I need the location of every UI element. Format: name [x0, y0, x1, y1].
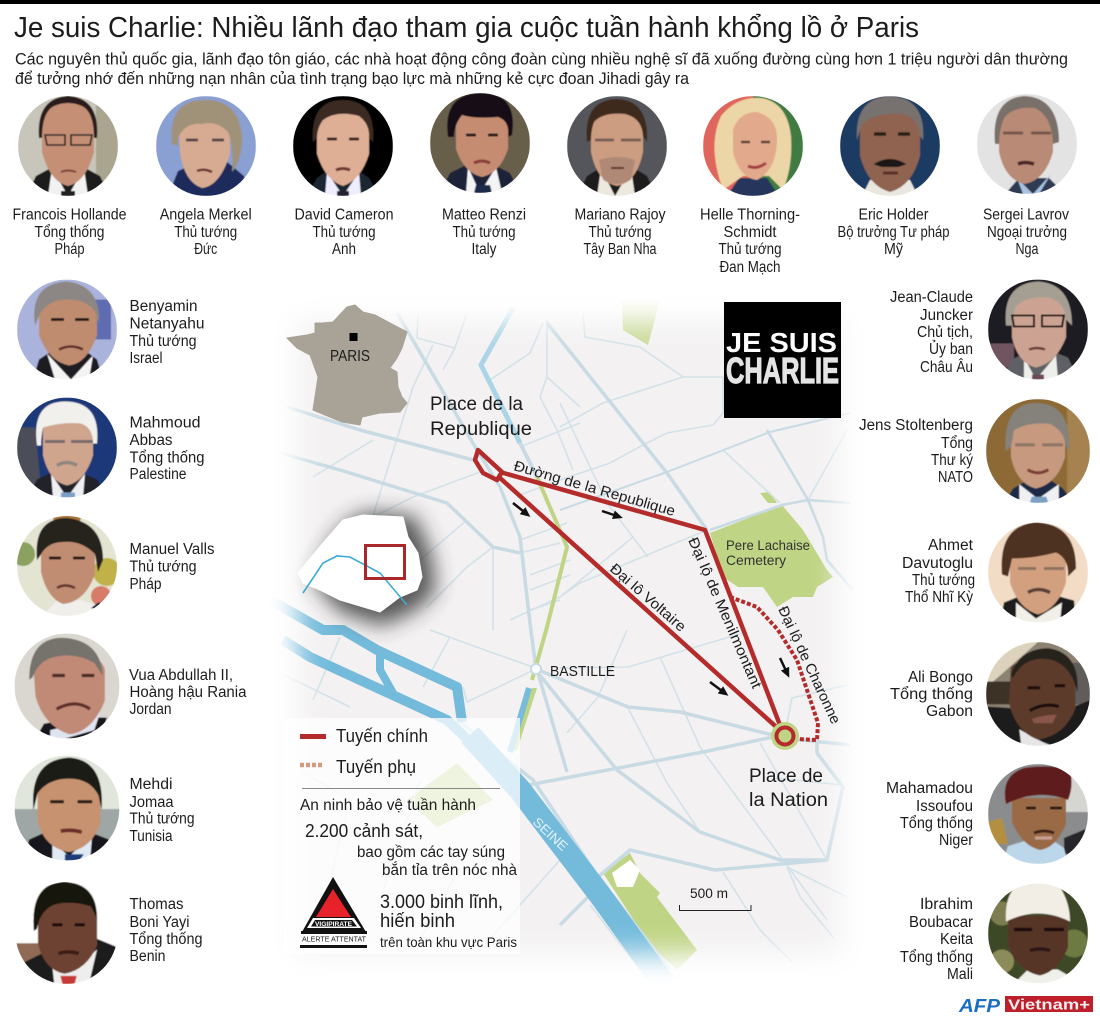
- person: Jean-Claude Juncker: Juncker: [920, 307, 973, 324]
- person: Manuel Valls: Manuel Valls: [130, 541, 215, 558]
- map labels: Đại lộ de Charonne: [774, 604, 843, 727]
- map labels: SEINE: [530, 814, 571, 854]
- security text: 3.000 binh lĩnh,: [380, 892, 503, 913]
- person: Jens Stoltenberg: [859, 399, 1090, 503]
- person: Jens Stoltenberg: Jens Stoltenberg: [859, 417, 973, 434]
- person: Thomas Boni Yayi: Benin: [130, 948, 166, 965]
- green areas: [407, 300, 833, 970]
- Paris marker: [330, 333, 370, 365]
- Place de la Nation marker: [771, 722, 799, 750]
- legend: main route: [300, 726, 428, 746]
- person: Ibrahim Boubacar Keita: Ibrahim: [920, 896, 973, 913]
- person: King Abdullah II: [15, 634, 247, 738]
- person: Mariano Rajoy: Mariano Rajoy: [574, 206, 666, 224]
- person: Eric Holder: Mỹ: [884, 241, 903, 258]
- legend panel: [284, 718, 520, 954]
- map: [260, 290, 870, 990]
- intro text: Các nguyên thủ quốc gia, lãnh đạo tôn giáo, các nhà hoạt động công đoàn cùng nhiều nghệ sĩ đã xuống đường cùng hơn 1 triệu người dân thường: [15, 50, 1068, 68]
- logo: Je suis Charlie: CHARLIE: [726, 350, 839, 391]
- legend: secondary route: Tuyến phụ: [336, 757, 416, 777]
- security text: bao gồm các tay súng: [357, 844, 505, 861]
- person: Angela Merkel: Thủ tướng: [174, 224, 237, 241]
- person: Sergei Lavrov: [977, 94, 1077, 258]
- person: King Abdullah II: Hoàng hậu Rania: [130, 684, 247, 701]
- major roads: [280, 313, 853, 970]
- legend: secondary route: [300, 757, 416, 777]
- intro text: [15, 50, 1068, 88]
- person: David Cameron: David Cameron: [294, 206, 394, 224]
- person: Francois Hollande: Pháp: [54, 241, 84, 258]
- person: Jens Stoltenberg: NATO: [938, 469, 973, 486]
- person: Ibrahim Boubacar Keita: Keita: [940, 931, 973, 948]
- direction arrows: [513, 503, 788, 694]
- person: Ibrahim Boubacar Keita: Mali: [947, 966, 973, 983]
- person: Mehdi Jomaa: Tunisia: [130, 828, 173, 845]
- person: Mariano Rajoy: Thủ tướng: [588, 224, 652, 241]
- person: Manuel Valls: Thủ tướng: [130, 558, 196, 576]
- map labels: Place de: [749, 766, 823, 787]
- person: Helle Thorning-Schmidt: Thủ tướng: [718, 241, 782, 258]
- river Seine: [270, 600, 665, 985]
- person: Angela Merkel: Đức: [194, 241, 217, 258]
- person: Ibrahim Boubacar Keita: [900, 882, 1088, 984]
- person: Thomas Boni Yayi: Tổng thống: [130, 931, 202, 948]
- person: Manuel Valls: [17, 516, 214, 616]
- map labels: Pere Lachaise: [726, 537, 810, 553]
- person: Matteo Renzi: Thủ tướng: [452, 224, 516, 241]
- person: Benyamin Netanyahu: [17, 280, 204, 380]
- person: Eric Holder: Eric Holder: [858, 206, 928, 224]
- logo: Je suis Charlie: [724, 302, 841, 418]
- security text: [300, 797, 517, 950]
- person: Ali Bongo: Ali Bongo: [908, 669, 973, 686]
- map labels: Đại lô Voltaire: [606, 561, 689, 635]
- person: Ahmet Davutoglu: Davutoglu: [902, 555, 973, 572]
- person: Thomas Boni Yayi: Thomas: [130, 896, 184, 913]
- logo: Vietnam+: Vietnam+: [1008, 996, 1090, 1014]
- person: Sergei Lavrov: Ngoại trưởng: [987, 224, 1067, 241]
- person: Helle Thorning-Schmidt: [700, 96, 803, 276]
- inset shadow: [312, 512, 436, 626]
- person: Helle Thorning-Schmidt: Đan Mạch: [720, 259, 780, 276]
- map labels: Cemetery: [726, 552, 786, 568]
- person: Eric Holder: [838, 96, 950, 258]
- person: Mahmoud Abbas: Mahmoud: [130, 414, 200, 432]
- map labels: Place de la: [430, 394, 523, 415]
- security text: hiến binh: [380, 911, 455, 932]
- person: Ibrahim Boubacar Keita: Boubacar: [909, 914, 973, 931]
- person: Mehdi Jomaa: [15, 756, 195, 860]
- person: Ali Bongo: Gabon: [926, 703, 973, 720]
- map labels: BASTILLE: [550, 663, 615, 680]
- person: Mahmoud Abbas: Palestine: [130, 466, 186, 483]
- person: Jean-Claude Juncker: Jean-Claude: [890, 289, 973, 306]
- person: Manuel Valls: Pháp: [130, 576, 162, 593]
- person: Ibrahim Boubacar Keita: Tổng thống: [900, 949, 973, 966]
- person: Sergei Lavrov: Nga: [1016, 241, 1039, 258]
- person: Mariano Rajoy: Tây Ban Nha: [584, 241, 657, 258]
- person: Benyamin Netanyahu: Thủ tướng: [130, 333, 196, 350]
- person: King Abdullah II: Jordan: [130, 701, 172, 718]
- person: Eric Holder: Bộ trưởng Tư pháp: [838, 224, 950, 241]
- person: Mahamadou Issoufou: [886, 764, 1088, 864]
- person: Mahamadou Issoufou: Mahamadou: [886, 780, 973, 797]
- person: Thomas Boni Yayi: [16, 882, 203, 984]
- minor roads: [280, 313, 847, 970]
- person: Mariano Rajoy: [567, 96, 667, 258]
- person: Mehdi Jomaa: Jomaa: [130, 794, 174, 811]
- person: Benyamin Netanyahu: Benyamin: [130, 298, 198, 315]
- top black band: [0, 0, 1100, 4]
- person: Matteo Renzi: Italy: [472, 241, 497, 258]
- map labels: [430, 394, 843, 854]
- person: Francois Hollande: [12, 96, 126, 258]
- scale bar: 500 m: [690, 886, 728, 901]
- title: Je suis Charlie: Nhiều lãnh đạo tham gia cuộc tuần hành khổng lồ ở Paris: [14, 12, 919, 44]
- person: Mahamadou Issoufou: Niger: [939, 832, 973, 849]
- Bastille marker: [531, 664, 541, 674]
- person: Thomas Boni Yayi: Boni Yayi: [130, 914, 190, 931]
- person: Benyamin Netanyahu: Netanyahu: [130, 316, 204, 332]
- person: Helle Thorning-Schmidt: Schmidt: [724, 224, 777, 241]
- logo: Je suis Charlie: JE SUIS: [726, 327, 837, 358]
- canal: [481, 308, 520, 443]
- person: Francois Hollande: Tổng thống: [34, 224, 104, 241]
- person: Ahmet Davutoglu: Thổ Nhĩ Kỳ: [905, 589, 973, 606]
- person: David Cameron: Anh: [332, 241, 356, 258]
- icon: Vigipirate: [300, 877, 367, 948]
- legend: main route: Tuyến chính: [336, 726, 428, 746]
- Paris marker: PARIS: [330, 348, 370, 365]
- person: Matteo Renzi: Matteo Renzi: [442, 206, 526, 224]
- main route: [475, 450, 783, 733]
- person: Jens Stoltenberg: Tổng: [941, 435, 973, 452]
- person: King Abdullah II: Vua Abdullah II,: [129, 667, 233, 684]
- person: Benyamin Netanyahu: Israel: [130, 350, 162, 367]
- person: Francois Hollande: Francois Hollande: [12, 206, 126, 224]
- person: David Cameron: [293, 96, 394, 258]
- person: Mehdi Jomaa: Mehdi: [130, 776, 172, 793]
- icon: Vigipirate: VIGIPIRATE: [315, 922, 352, 928]
- person: Jean-Claude Juncker: Ủy ban: [929, 340, 973, 358]
- person: Mehdi Jomaa: Thủ tướng: [130, 810, 194, 828]
- person: Jean-Claude Juncker: [890, 280, 1088, 380]
- icon: Vigipirate: ALERTE ATTENTAT: [302, 934, 366, 944]
- security text: 2.200 cảnh sát,: [305, 821, 423, 841]
- person: Mahmoud Abbas: Abbas: [130, 432, 173, 449]
- map base with roads: [260, 290, 870, 990]
- map labels: la Nation: [749, 790, 828, 811]
- person: Matteo Renzi: [430, 93, 530, 258]
- person: Ali Bongo: Tổng thống: [890, 686, 973, 703]
- map labels: Republique: [430, 419, 532, 440]
- person: Sergei Lavrov: Sergei Lavrov: [983, 206, 1069, 224]
- person: Mahmoud Abbas: [17, 398, 204, 498]
- security text: bắn tỉa trên nóc nhà: [382, 862, 517, 879]
- France map: [287, 305, 407, 425]
- person: Jens Stoltenberg: Thư ký: [931, 452, 973, 469]
- scale bar: [680, 886, 751, 910]
- person: Angela Merkel: [156, 96, 256, 258]
- person: Ahmet Davutoglu: Ahmet: [928, 537, 974, 554]
- person: David Cameron: Thủ tướng: [312, 224, 376, 241]
- person: Jean-Claude Juncker: Châu Âu: [920, 359, 973, 376]
- person: Ahmet Davutoglu: Thủ tướng: [912, 572, 975, 589]
- person: Mahamadou Issoufou: Issoufou: [916, 798, 973, 815]
- person: Ali Bongo: [890, 642, 1090, 746]
- security text: trên toàn khu vực Paris: [380, 934, 517, 950]
- person: Angela Merkel: Angela Merkel: [160, 206, 252, 224]
- inset: Paris map: [298, 515, 422, 612]
- map labels: Đường de la Republique: [512, 458, 677, 520]
- person: Jean-Claude Juncker: Chủ tịch,: [917, 324, 973, 341]
- intro text: để tưởng nhớ đến những nạn nhân của tình trạng bạo lực mà những kẻ cực đoan Jihadi gây ra: [15, 70, 690, 88]
- security text: An ninh bảo vệ tuần hành: [300, 797, 476, 814]
- person: Ahmet Davutoglu: [902, 522, 1088, 622]
- logo: AFP: AFP: [958, 996, 1001, 1016]
- person: Mahamadou Issoufou: Tổng thống: [900, 815, 973, 832]
- person: Helle Thorning-Schmidt: Helle Thorning-: [700, 206, 800, 224]
- secondary route: [730, 597, 818, 740]
- person: Mahmoud Abbas: Tổng thống: [130, 450, 204, 466]
- map labels: Đại lộ de Menilmontant: [684, 535, 764, 691]
